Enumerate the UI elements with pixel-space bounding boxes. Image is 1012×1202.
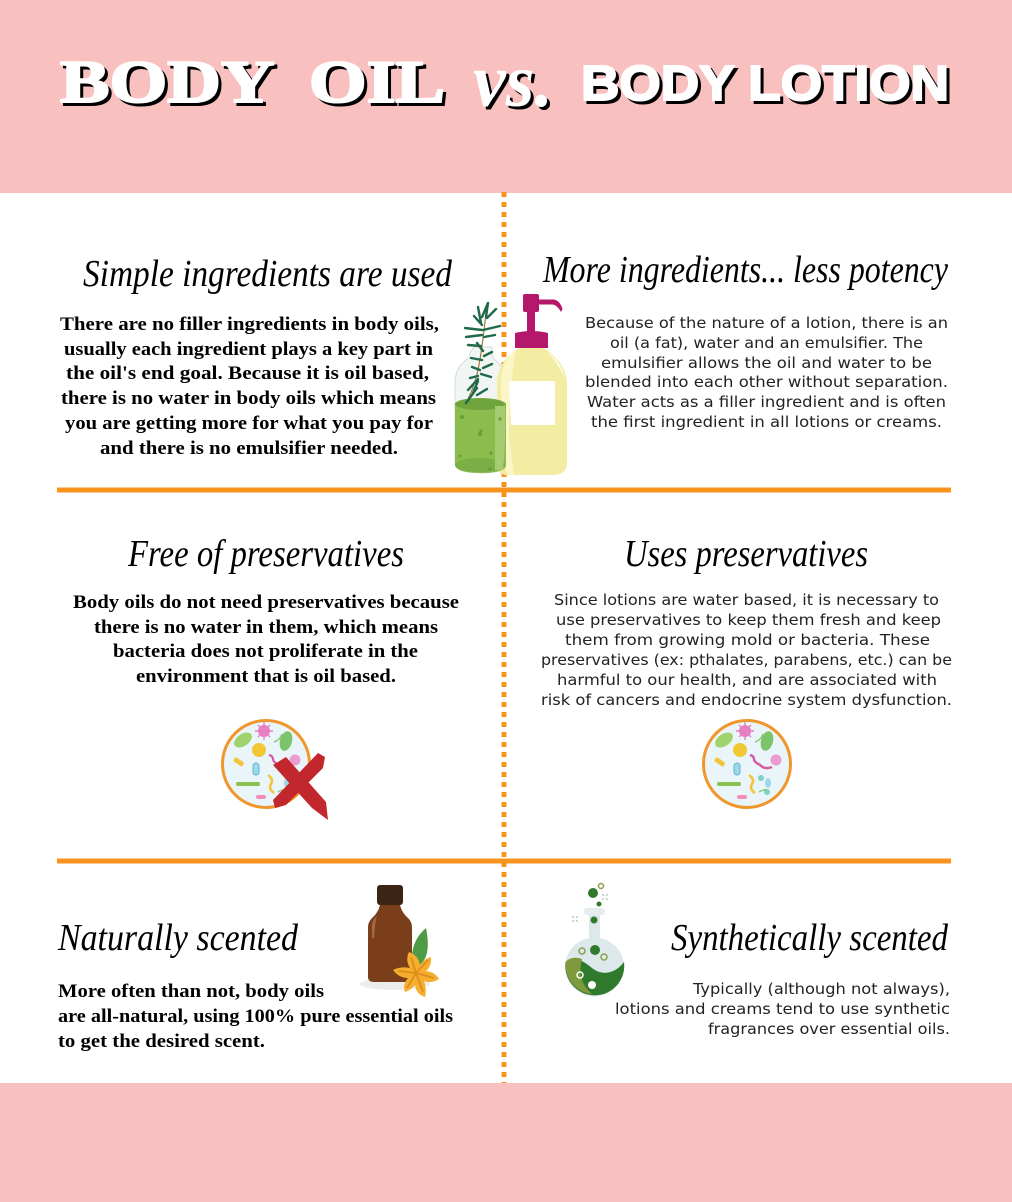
text block: uses preservatives: preservatives (ex: pthalates, parabens, etc.) can be — [541, 651, 952, 669]
text block: free of preservatives — [73, 592, 459, 687]
text block: more ingredients: Water acts as a filler ingredient and is often — [587, 393, 946, 411]
heading: synthetically scented: Synthetically scented — [671, 917, 949, 959]
text block: simple ingredients: the oil's end goal. Because it is oil based, — [66, 363, 429, 384]
text block: synthetically scented: fragrances over essential oils. — [708, 1020, 950, 1038]
text block: uses preservatives: them from growing mold or bacteria. These — [565, 631, 930, 649]
text block: simple ingredients — [60, 314, 439, 459]
text block: uses preservatives: risk of cancers and endocrine system dysfunction. — [541, 691, 952, 709]
heading: more ingredients: More ingredients... less potency — [542, 249, 948, 291]
heading: naturally scented: Naturally scented — [57, 917, 299, 959]
text block: free of preservatives: bacteria does not proliferate in the — [113, 641, 418, 662]
text block: simple ingredients: and there is no emulsifier needed. — [100, 438, 398, 459]
panel: uses preservatives — [541, 533, 952, 808]
text block: uses preservatives: harmful to our health, and are associated with — [557, 671, 937, 689]
text block: naturally scented: are all-natural, using 100% pure essential oils — [58, 1006, 453, 1027]
icon: amber essential oil bottle with flower — [360, 885, 439, 997]
panel: free of preservatives — [73, 533, 459, 820]
text block: free of preservatives: Body oils do not need preservatives because — [73, 592, 459, 613]
text block: uses preservatives — [541, 591, 952, 709]
text block: more ingredients: emulsifier allows the oil and water to be — [601, 354, 932, 372]
text block: naturally scented: to get the desired scent. — [58, 1031, 265, 1052]
icon: oil bottle with rosemary — [455, 294, 567, 475]
text block: simple ingredients: you are getting more for what you pay for — [65, 413, 434, 434]
heading: uses preservatives: Uses preservatives — [624, 533, 868, 575]
title: BODY LOTION — [581, 57, 949, 111]
text block: more ingredients: oil (a fat), water and an emulsifier. The — [610, 334, 923, 352]
text block: more ingredients: Because of the nature of a lotion, there is an — [585, 314, 948, 332]
panel: simple ingredients — [60, 253, 453, 459]
text block: uses preservatives: use preservatives to keep them fresh and keep — [556, 611, 941, 629]
text block: simple ingredients: usually each ingredient plays a key part in — [64, 339, 433, 360]
header band — [0, 0, 1012, 193]
heading: free of preservatives: Free of preservatives — [127, 533, 404, 575]
title: vs. — [473, 39, 553, 123]
text block: naturally scented: More often than not, body oils — [58, 981, 324, 1002]
text block: naturally scented — [58, 981, 453, 1052]
panel: naturally scented — [57, 885, 453, 1052]
panel: more ingredients — [542, 249, 948, 431]
heading: simple ingredients: Simple ingredients are used — [83, 253, 453, 295]
footer band — [0, 1083, 1012, 1202]
text block: synthetically scented: lotions and creams tend to use synthetic — [615, 1000, 950, 1018]
icon: bacteria — [704, 720, 790, 808]
text block: more ingredients: the first ingredient in all lotions or creams. — [591, 413, 942, 431]
text block: free of preservatives: there is no water in them, which means — [94, 617, 438, 638]
text block: simple ingredients: there is no water in body oils which means — [61, 388, 436, 409]
icon: crossed-out bacteria — [222, 720, 310, 808]
text block: more ingredients — [585, 314, 948, 431]
text block: uses preservatives: Since lotions are water based, it is necessary to — [554, 591, 939, 609]
text block: synthetically scented — [615, 980, 950, 1038]
text block: simple ingredients: There are no filler ingredients in body oils, — [60, 314, 439, 335]
title — [60, 39, 949, 123]
text block: synthetically scented: Typically (although not always), — [692, 980, 950, 998]
icon: red cross — [273, 753, 328, 820]
title: BODY OIL — [60, 49, 445, 115]
text block: more ingredients: blended into each other without separation. — [585, 373, 948, 391]
icon: green flask — [565, 884, 624, 996]
text block: free of preservatives: environment that is oil based. — [136, 666, 396, 687]
panel: synthetically scented — [565, 884, 950, 1038]
